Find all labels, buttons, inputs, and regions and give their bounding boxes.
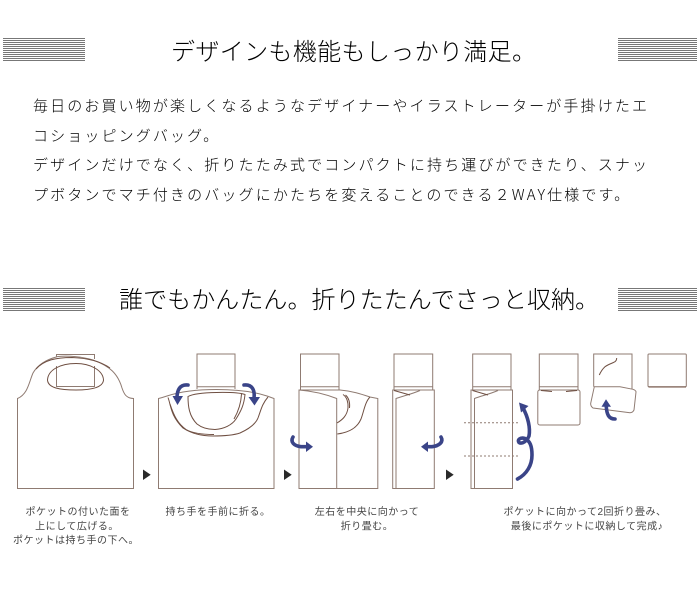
caption: step 5: ポケットに向かって2回折り畳み、 xyxy=(503,505,667,518)
heading: easy folding: 誰でもかんたん。折りたたんでさっと収納。 xyxy=(119,280,599,315)
intro paragraph xyxy=(33,95,649,205)
caption: step 1: 上にして広げる。 xyxy=(35,520,119,532)
step 6: folded with pocket xyxy=(538,354,580,425)
step 4: fold right side xyxy=(393,354,442,488)
stripe block: top right xyxy=(618,37,697,62)
intro paragraph: デザインだけでなく、折りたたみ式でコンパクトに持ち運びができたり、スナッ xyxy=(33,154,649,175)
caption: step 1: ポケットは持ち手の下へ。 xyxy=(13,534,139,547)
stripe block: middle right xyxy=(618,287,697,312)
heading: design and function: デザインも機能もしっかり満足。 xyxy=(171,32,536,67)
arrow: step 1 to 2 xyxy=(143,470,151,480)
intro paragraph: 毎日のお買い物が楽しくなるようなデザイナーやイラストレーターが手掛けたエ xyxy=(33,95,649,116)
step 8: finished pouch xyxy=(648,354,686,387)
step 3: fold left side xyxy=(292,354,378,488)
step 1: open bag xyxy=(18,354,134,488)
stripe block: middle left xyxy=(3,287,85,312)
step 2: fold handles xyxy=(158,354,274,488)
caption: step 1: ポケットの付いた面を xyxy=(26,505,130,518)
stripe block: top left xyxy=(3,37,85,62)
step 7: stow into pocket xyxy=(591,354,636,419)
arrow: step 2 to 3 xyxy=(284,470,292,480)
arrow: step 4 to 5 xyxy=(446,470,454,480)
caption: step 3: 左右を中央に向かって xyxy=(315,505,419,518)
intro paragraph: コショッピングバッグ。 xyxy=(33,125,220,146)
caption: step 5: 最後にポケットに収納して完成♪ xyxy=(511,519,663,532)
step 5: fold twice xyxy=(464,354,532,488)
caption: step 2: 持ち手を手前に折る。 xyxy=(166,505,270,518)
caption: step 3: 折り畳む。 xyxy=(341,519,393,532)
intro paragraph: プボタンでマチ付きのバッグにかたちを変えることのできる２WAY仕様です。 xyxy=(33,184,631,205)
